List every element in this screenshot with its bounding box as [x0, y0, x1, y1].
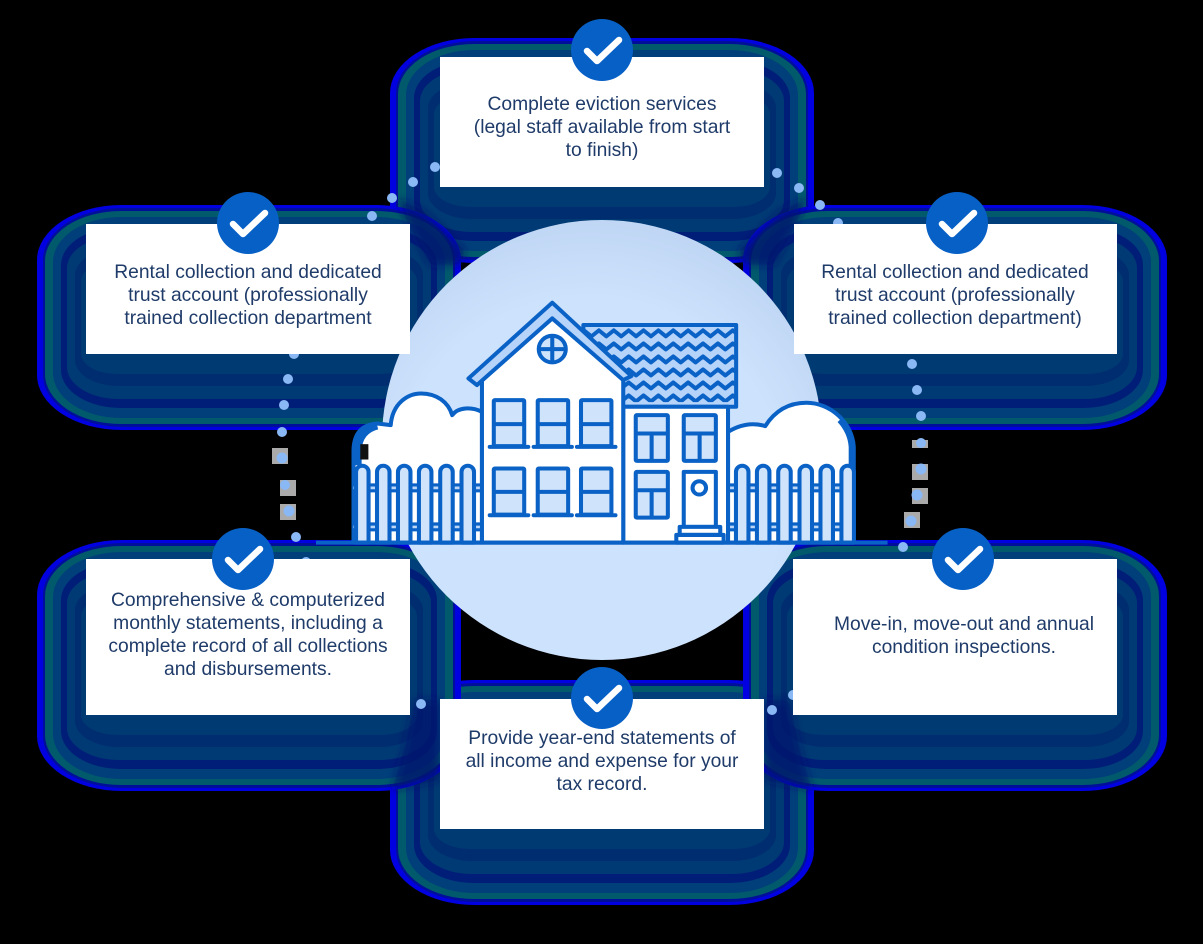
card: monthly statements: and disbursements.: [164, 659, 332, 680]
card: rental collection left: trust account (professionally: [128, 285, 368, 306]
card: rental collection right: trained collection department): [828, 308, 1082, 329]
card: monthly statements: monthly statements, including a: [113, 613, 383, 634]
card: year-end statements: all income and expense for your: [466, 751, 739, 772]
main body: [468, 303, 631, 543]
card: rental collection left: Rental collection and dedicated: [114, 262, 382, 283]
card: year-end statements: [440, 667, 764, 829]
fence: [354, 466, 854, 543]
card: inspections: [793, 528, 1117, 715]
right wing: [623, 407, 728, 543]
card: monthly statements: complete record of all collections: [108, 636, 388, 657]
dotted connectors: [272, 162, 928, 715]
card: monthly statements: [86, 528, 410, 715]
central circle: [382, 220, 822, 660]
card: inspections: Move-in, move-out and annual: [834, 614, 1094, 635]
card: rental collection right: [794, 192, 1117, 354]
bushes: [354, 393, 854, 543]
card: eviction services: [440, 19, 764, 187]
card: eviction services: to finish): [566, 140, 638, 161]
card: inspections: condition inspections.: [872, 637, 1056, 658]
side roof: [577, 325, 740, 407]
card: eviction services: (legal staff available from start: [474, 117, 731, 138]
card: rental collection left: [86, 192, 410, 354]
card: eviction services: Complete eviction services: [488, 94, 716, 115]
card: rental collection right: trust account (professionally: [835, 285, 1075, 306]
card: year-end statements: Provide year-end statements of: [468, 728, 736, 749]
card: year-end statements: tax record.: [557, 774, 647, 795]
house illustration: [316, 303, 888, 543]
card: rental collection left: trained collection department: [124, 308, 372, 329]
main windows: [490, 400, 615, 515]
card: monthly statements: Comprehensive & computerized: [111, 590, 385, 611]
door: [676, 472, 724, 543]
ground line: [316, 537, 888, 549]
card: rental collection right: Rental collection and dedicated: [821, 262, 1089, 283]
